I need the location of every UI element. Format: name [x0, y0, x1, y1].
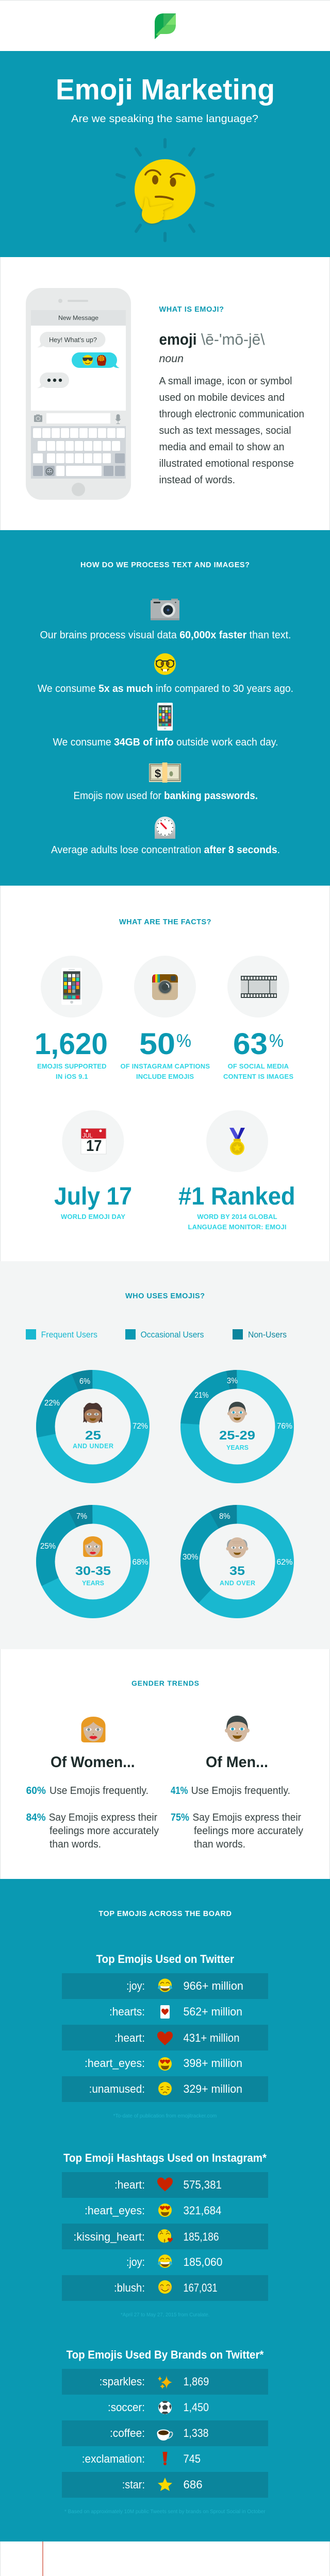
column: men: 75%: [171, 1812, 189, 1823]
stat: 1,620 emojis: IN iOS 9.1: [56, 1073, 88, 1080]
stat: 50% instagram: 50: [139, 1027, 175, 1061]
donut chart: 25-29: YEARS: [226, 1444, 249, 1451]
icon: calendar: [81, 1128, 106, 1155]
part of speech: noun: [159, 353, 184, 365]
stat: July 17: WORLD EMOJI DAY: [61, 1213, 125, 1221]
column: men: Of Men...: [206, 1754, 268, 1771]
phone input bar: [31, 411, 126, 426]
row: soccer: [108, 2401, 209, 2414]
row: hearts: 562+ million: [184, 2005, 242, 2018]
panel: gender trends: [0, 1649, 330, 1879]
icon: older man: [226, 1537, 249, 1558]
chat bubble: emoji reply: [72, 352, 120, 368]
row: star: :star:: [122, 2478, 145, 2491]
definition text: through electronic communication: [159, 409, 304, 420]
icon: calendar: 17: [86, 1137, 102, 1155]
stat: July 17: July 17: [54, 1183, 132, 1210]
row: exclamation: [82, 2452, 201, 2465]
icon: stopwatch: [155, 817, 175, 839]
definition text: media and email to show an: [159, 442, 285, 453]
icon: woman: [81, 1717, 105, 1742]
row: heart: [114, 2031, 239, 2045]
table: instagram: [62, 2151, 268, 2318]
donut chart: 25 and under: AND UNDER: [73, 1443, 113, 1450]
title: Emoji Marketing: [56, 73, 275, 106]
phone illustration: [26, 288, 131, 500]
row: joy: [126, 2255, 222, 2268]
column: women: than words.: [50, 1839, 101, 1850]
stat: 1,620 emojis: EMOJIS SUPPORTED: [37, 1062, 106, 1070]
footnote: *To-date of publication from emojitracker.com: [113, 2113, 217, 2119]
column: men: Say Emojis express their: [193, 1812, 301, 1823]
heading: TOP EMOJIS ACROSS THE BOARD: [98, 1910, 232, 1918]
table: brands: [62, 2348, 268, 2515]
phone header text: New Message: [58, 314, 98, 321]
panel: what are the facts: [0, 886, 330, 1261]
footnote: * Based on approximately 10M public Tweets sent by brands on Sprout Social in October: [64, 2509, 266, 2515]
icon: man: [225, 1716, 250, 1742]
definition text: instead of words.: [159, 474, 235, 486]
icon: radiating lines: [117, 140, 213, 241]
table: instagram: Top Emoji Hashtags Used on Instagram*: [63, 2151, 267, 2164]
donut chart: 25-29: 76%: [277, 1422, 292, 1431]
definition text: such as text messages, social: [159, 425, 291, 436]
icon: money: [149, 762, 181, 783]
column: women: Say Emojis express their: [49, 1812, 157, 1823]
row: soccer: :soccer:: [108, 2401, 145, 2414]
icon: medal: [229, 1128, 245, 1155]
column: women: 60%: [26, 1785, 46, 1797]
stat: 50% instagram: OF INSTAGRAM CAPTIONS: [121, 1062, 210, 1070]
row: joy: :joy:: [126, 1979, 145, 1992]
donut chart: 30-35: 7%: [76, 1512, 87, 1521]
legend: Non-Users: [248, 1330, 287, 1340]
definition text: used on mobile devices and: [159, 392, 285, 403]
row: joy: 966+ million: [184, 1979, 243, 1992]
chat bubble: incoming message: Hey! What’s up?: [49, 336, 97, 344]
panel: header: [0, 0, 330, 39]
icon: film strip: [241, 976, 277, 998]
chat bubble: typing dots: [37, 372, 69, 388]
row: blush: [114, 2280, 218, 2294]
definition text: [159, 376, 304, 486]
heading: HOW DO WE PROCESS TEXT AND IMAGES?: [80, 561, 250, 569]
row: joy: 185,060: [184, 2256, 222, 2268]
column: women: feelings more accurately: [50, 1825, 159, 1837]
row: heart: 575,381: [184, 2178, 222, 2191]
icon: thinking face: [135, 159, 195, 224]
fact text: banking: Emojis now used for banking passwords.: [73, 790, 258, 802]
donut chart: 35 and over: 62%: [276, 1558, 293, 1567]
donut chart: 30-35: 30-35: [75, 1564, 111, 1578]
row: joy: :joy:: [126, 2256, 145, 2268]
heading: what is emoji: WHAT IS EMOJI?: [159, 306, 224, 314]
fact text: visual data: Our brains process visual data 60,000x faster than text.: [40, 629, 291, 641]
row: coffee: :coffee:: [110, 2427, 145, 2439]
stat: #1 ranked: WORD BY 2014 GLOBAL: [197, 1213, 277, 1221]
row: hearts: [109, 2005, 242, 2019]
column: women: [26, 1717, 159, 1850]
row: blush: :blush:: [114, 2281, 145, 2294]
donut chart: 35 and over: AND OVER: [220, 1580, 255, 1587]
column: men: Use Emojis frequently.: [191, 1785, 290, 1797]
row: sparkles: 1,869: [184, 2375, 209, 2388]
legend: [26, 1329, 287, 1340]
icon: nerd face: [154, 653, 176, 675]
donut chart: 25 and under: 22%: [44, 1399, 60, 1408]
subtitle: Are we speaking the same language?: [71, 113, 258, 125]
stat: #1 ranked: [178, 1110, 295, 1231]
stat: 63% images: OF SOCIAL MEDIA: [228, 1062, 289, 1070]
stat: #1 ranked: LANGUAGE MONITOR: EMOJI: [188, 1223, 287, 1231]
heading: WHAT ARE THE FACTS?: [119, 918, 211, 926]
row: soccer: 1,450: [184, 2401, 209, 2414]
row: blush: 167,031: [184, 2281, 218, 2294]
column: men: [171, 1716, 303, 1850]
icon: calendar: JUL: [82, 1132, 93, 1139]
table: brands: Top Emojis Used By Brands on Twitter*: [67, 2348, 264, 2361]
stat: 63% images: %: [269, 1031, 284, 1051]
panel: what is emoji: [0, 257, 330, 530]
donut chart: 25-29: [190, 1377, 292, 1474]
row: coffee: [110, 2427, 208, 2441]
stat: 1,620 emojis: 1,620: [35, 1027, 108, 1061]
stat: 63% images: 63: [233, 1027, 268, 1061]
donut chart: 35 and over: 35: [229, 1564, 245, 1578]
icon: girl: [83, 1403, 103, 1423]
stat: 50% instagram: [121, 956, 210, 1080]
stat: 63% images: CONTENT IS IMAGES: [223, 1073, 293, 1080]
icon: camera: [151, 599, 179, 620]
legend: Occasional Users: [141, 1330, 204, 1340]
donut chart: 25 and under: 25: [85, 1429, 101, 1443]
donut chart: 35 and over: 8%: [219, 1512, 230, 1521]
table: twitter: [62, 1953, 268, 2119]
stat: 50% instagram: INCLUDE EMOJIS: [136, 1073, 194, 1080]
row: exclamation: 745: [184, 2452, 201, 2465]
row: coffee: 1,338: [184, 2427, 208, 2439]
stat: #1 ranked: #1 Ranked: [178, 1183, 295, 1210]
panel: hero: [0, 51, 330, 257]
row: sparkles: :sparkles:: [100, 2375, 145, 2388]
row: sparkles: [100, 2375, 209, 2389]
fact text: 34GB: We consume 34GB of info outside work each day.: [53, 736, 278, 748]
row: heart eyes: :heart_eyes:: [85, 2057, 145, 2070]
panel: how do we process text and images: [0, 530, 330, 886]
column: men: 41%: [171, 1785, 188, 1797]
heading: WHO USES EMOJIS?: [125, 1292, 205, 1300]
row: heart: :heart:: [114, 2178, 145, 2191]
donut chart: 25 and under: [44, 1377, 148, 1474]
donut chart: 25 and under: 6%: [79, 1377, 90, 1386]
panel: who uses emojis: [0, 1261, 330, 1649]
row: star: [122, 2478, 203, 2491]
row: kissing heart: [73, 2229, 219, 2243]
row: unamused: 329+ million: [184, 2082, 242, 2095]
stat: 63% images: [223, 956, 293, 1080]
row: heart eyes: [85, 2204, 221, 2217]
row: hearts: :hearts:: [109, 2005, 145, 2018]
panel: top emojis: [0, 1879, 330, 2541]
donut chart: 30-35: [40, 1512, 148, 1609]
stat: 1,620 emojis: [35, 956, 108, 1080]
icon: sprout leaf logo: [155, 13, 176, 39]
icon: smartphone: [157, 703, 173, 731]
stat: July 17: [54, 1110, 132, 1221]
row: joy: [126, 1978, 243, 1992]
definition word: emoji: [159, 330, 197, 348]
row: unamused: :unamused:: [89, 2082, 145, 2095]
stat: 50% instagram: %: [176, 1031, 191, 1051]
panel: checklist notebook: [0, 2541, 330, 2576]
row: heart: 431+ million: [184, 2031, 239, 2044]
column: men: than words.: [194, 1839, 245, 1850]
phone keyboard: [31, 426, 126, 479]
row: heart eyes: [85, 2057, 242, 2071]
table: twitter: Top Emojis Used on Twitter: [96, 1953, 234, 1965]
column: women: Of Women...: [51, 1754, 135, 1771]
fact text: 5x as much: We consume 5x as much info compared to 30 years ago.: [38, 683, 293, 694]
column: women: 84%: [26, 1812, 46, 1823]
column: men: feelings more accurately: [194, 1825, 303, 1837]
row: heart eyes: :heart_eyes:: [85, 2204, 145, 2217]
fact text: 8 seconds: Average adults lose concentration after 8 seconds.: [51, 844, 280, 856]
donut chart: 35 and over: 30%: [183, 1553, 198, 1562]
donut chart: 25 and under: 72%: [133, 1422, 148, 1431]
icon: woman: [83, 1536, 103, 1557]
donut chart: 25-29: 3%: [227, 1377, 238, 1385]
donut chart: 30-35: 68%: [132, 1558, 148, 1567]
heading: GENDER TRENDS: [131, 1679, 199, 1687]
icon: instagram: [152, 974, 178, 1000]
donut chart: 25-29: 21%: [195, 1391, 208, 1400]
pronunciation: \ē-'mō-jē\: [201, 330, 265, 348]
row: heart eyes: 321,684: [184, 2204, 221, 2217]
column: women: Use Emojis frequently.: [50, 1785, 148, 1797]
row: unamused: [89, 2082, 242, 2095]
footnote: *April 27 to May 27, 2015 from Curalate.: [121, 2312, 209, 2318]
row: kissing heart: :kissing_heart:: [73, 2230, 145, 2243]
donut chart: 30-35: YEARS: [82, 1580, 104, 1587]
donut chart: 35 and over: [183, 1512, 293, 1609]
donut chart: 30-35: 25%: [40, 1542, 56, 1551]
row: exclamation: :exclamation:: [82, 2452, 145, 2465]
chat bubble: incoming message: [37, 332, 105, 347]
row: kissing heart: 185,186: [184, 2230, 219, 2243]
legend: Frequent Users: [41, 1330, 97, 1340]
definition text: illustrated emotional response: [159, 458, 294, 469]
row: star: 686: [184, 2478, 203, 2491]
donut chart: 25-29: 25-29: [219, 1429, 255, 1443]
row: heart: [114, 2177, 222, 2192]
icon: money: $: [155, 767, 161, 780]
icon: young man: [227, 1402, 247, 1423]
row: heart: :heart:: [114, 2031, 145, 2044]
row: heart eyes: 398+ million: [184, 2057, 242, 2070]
definition text: A small image, icon or symbol: [159, 376, 292, 387]
